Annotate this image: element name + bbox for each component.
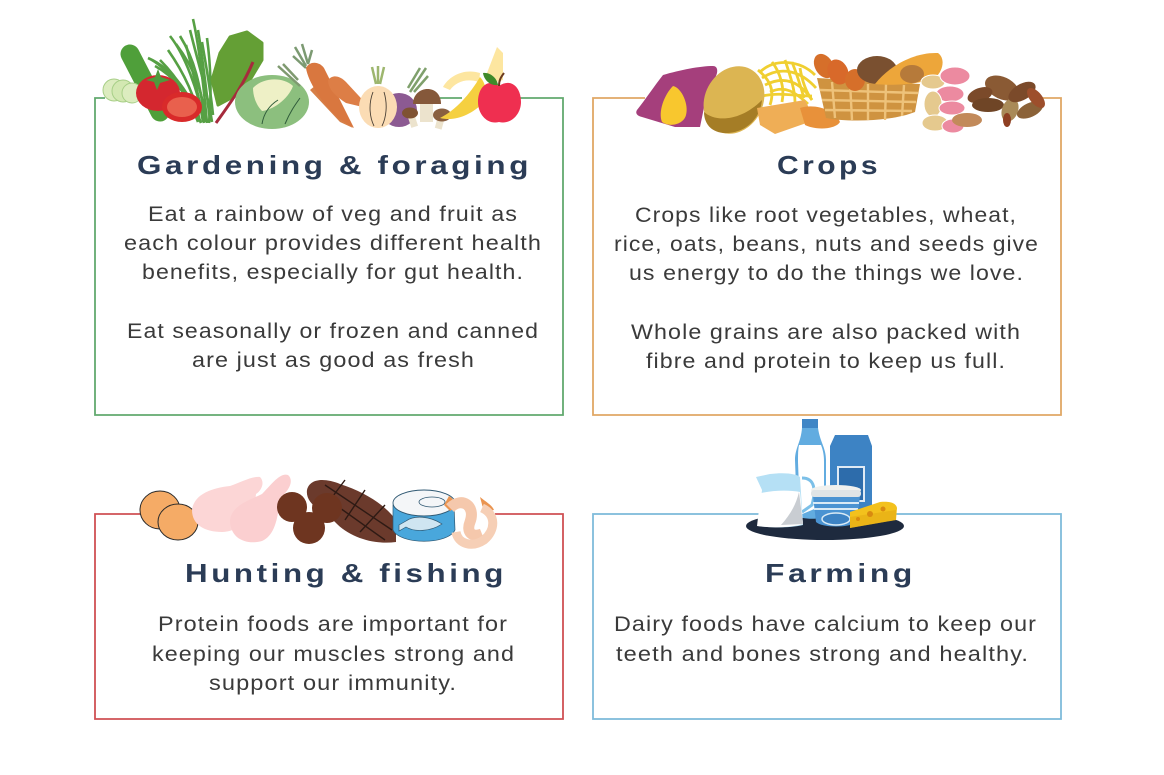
- body text: Whole grains are also packed with: [631, 320, 1021, 344]
- body text: rice, oats, beans, nuts and seeds give: [614, 232, 1039, 256]
- icon: row of protein foods: [140, 475, 494, 544]
- panel: crops: [593, 50, 1061, 415]
- panel: farming: [593, 419, 1061, 719]
- body text: each colour provides different health: [124, 231, 542, 255]
- body text: Crops like root vegetables, wheat,: [635, 203, 1017, 227]
- panel border blue: [593, 514, 1061, 719]
- heading: Farming: [765, 558, 916, 588]
- body text: support our immunity.: [209, 671, 457, 695]
- body text: Eat seasonally or frozen and canned: [127, 319, 539, 343]
- body text: benefits, especially for gut health.: [142, 260, 524, 284]
- body text: [614, 612, 1037, 666]
- body text: Eat a rainbow of veg and fruit as: [148, 202, 518, 226]
- body text: [614, 203, 1039, 373]
- body text: Dairy foods have calcium to keep our: [614, 612, 1037, 636]
- heading: Hunting & fishing: [185, 558, 507, 588]
- panel border orange: [593, 98, 1061, 415]
- body text: [124, 202, 542, 372]
- body text: us energy to do the things we love.: [629, 261, 1024, 285]
- heading: Crops: [777, 150, 881, 180]
- panel border red: [95, 514, 563, 719]
- body text: [152, 612, 515, 695]
- panel: hunting and fishing: [95, 475, 563, 719]
- icon: dairy products on tray: [746, 419, 904, 540]
- body text: teeth and bones strong and healthy.: [616, 642, 1029, 666]
- body text: keeping our muscles strong and: [152, 642, 515, 666]
- panel border green: [95, 98, 563, 415]
- icon: row of crops and grains: [636, 50, 1048, 145]
- icon: row of vegetables and fruit: [103, 19, 521, 130]
- body text: are just as good as fresh: [192, 348, 475, 372]
- panel: gardening and foraging: [95, 19, 563, 415]
- heading: Gardening & foraging: [137, 150, 532, 180]
- body text: Protein foods are important for: [158, 612, 508, 636]
- body text: fibre and protein to keep us full.: [646, 349, 1006, 373]
